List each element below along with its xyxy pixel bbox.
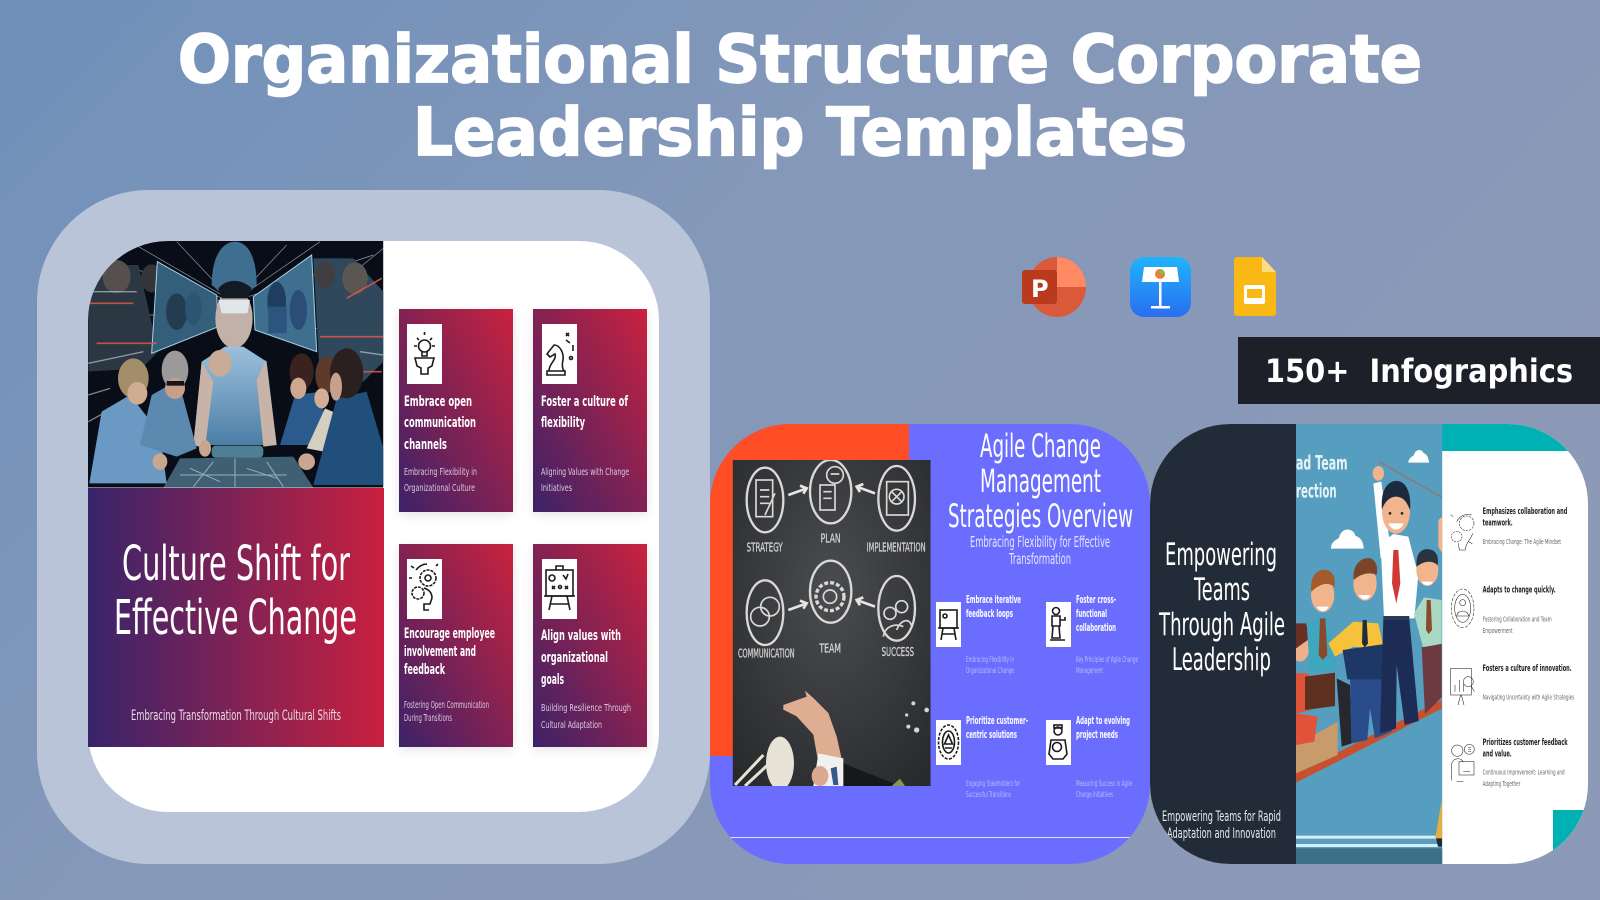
panel: agile leadership slide: [1150, 424, 1588, 864]
illustration: team climbing with leader: ad Team: [1296, 451, 1348, 474]
item: evolving project needs: [1046, 715, 1132, 799]
icon: google slides: [1234, 257, 1276, 316]
heading: empowering teams: Adaptation and Innovation: [1167, 826, 1276, 842]
heading: empowering teams: Teams: [1193, 572, 1250, 608]
heading: agile change management: [948, 427, 1133, 568]
card: culture of flexibility: Foster a culture of: [541, 394, 629, 410]
item: cross-functional collaboration: Foster cross-: [1076, 594, 1116, 606]
photo: chalkboard diagram: SUCCESS: [882, 644, 914, 659]
photo: leadership team at holographic table: [87, 240, 383, 488]
item: evolving project needs: Change Initiatives: [1076, 790, 1113, 799]
item: adapts to change: Empowerment: [1483, 627, 1513, 635]
icon: strategy board: [542, 559, 577, 619]
title block: culture shift: Effective Change: [114, 590, 357, 646]
icon: powerpoint: P: [1031, 275, 1049, 303]
card: employee involvement: involvement and: [404, 644, 476, 660]
item: iterative feedback: Organizational Change: [966, 666, 1014, 675]
item: customer feedback: [1452, 738, 1568, 788]
card: culture of flexibility: Aligning Values with Change: [541, 467, 629, 478]
card: open communication: [399, 309, 513, 512]
card: employee involvement: During Transitions: [404, 713, 452, 724]
title block: culture shift: Embracing Transformation Through Cultural Shifts: [131, 708, 341, 724]
icon: bulb with gears: [1451, 514, 1474, 550]
illustration: team climbing with leader: rection: [1296, 479, 1337, 502]
photo: chalkboard diagram: IMPLEMENTATION: [867, 540, 926, 555]
icon: gear with person: [1451, 589, 1474, 628]
title: [178, 21, 1422, 171]
icon: chess knight strategy: [542, 324, 577, 384]
item: customer-centric solutions: Engaging Stakeholders for: [966, 779, 1020, 788]
heading: agile change management: Embracing Flexibility for Effective: [970, 533, 1110, 551]
icon: brain gear bulb: [407, 559, 442, 619]
card: culture of flexibility: Initiatives: [541, 483, 572, 494]
item: customer-centric solutions: Successful Transitions: [966, 790, 1011, 799]
icon: keynote: [1130, 257, 1191, 317]
card: open communication: Embrace open: [404, 394, 472, 410]
card: organizational goals: Cultural Adaptation: [541, 720, 602, 731]
badge: 150+ infographics: [1238, 337, 1600, 404]
badge: 150+ infographics: 150+ Infographics: [1265, 352, 1573, 390]
item: iterative feedback: [936, 594, 1021, 675]
photo: chalkboard diagram: COMMUNICATION: [738, 645, 795, 660]
item: collaboration and teamwork: teamwork.: [1483, 519, 1513, 529]
item: iterative feedback: Embracing Flexibility in: [966, 655, 1014, 664]
item: culture of innovation: [1451, 664, 1575, 705]
card: employee involvement: Encourage employee: [404, 626, 495, 642]
item: collaboration and teamwork: [1451, 507, 1567, 550]
heading: agile change management: Transformation: [1008, 550, 1071, 568]
panel: agile change slide: [710, 424, 1150, 864]
icon: customers with laptop: [1452, 744, 1474, 782]
item: evolving project needs: Measuring Success in Agile: [1076, 779, 1132, 788]
heading: agile change management: Strategies Overview: [948, 497, 1133, 535]
card: employee involvement: Fostering Open Communication: [404, 700, 489, 711]
card: open communication: Organizational Culture: [404, 483, 475, 494]
item: cross-functional collaboration: Management: [1076, 666, 1103, 675]
item: adapts to change: Fostering Collaboration and Team: [1483, 615, 1552, 623]
heading: empowering teams: Empowering: [1165, 537, 1277, 573]
photo: chalkboard diagram: [733, 460, 931, 790]
title: Organizational Structure Corporate: [178, 21, 1422, 98]
item: customer feedback: Adapting Together: [1483, 780, 1520, 788]
photo: chalkboard diagram: STRATEGY: [747, 540, 783, 555]
title: Leadership Templates: [413, 94, 1187, 171]
item: customer-centric solutions: [936, 715, 1028, 799]
card: organizational goals: goals: [541, 672, 564, 688]
item: evolving project needs: Adapt to evolving: [1076, 715, 1130, 727]
item: customer feedback: and value.: [1483, 750, 1512, 760]
item: cross-functional collaboration: [1046, 594, 1138, 675]
item: customer-centric solutions: centric solutions: [966, 729, 1017, 741]
heading: empowering teams: Leadership: [1172, 642, 1271, 678]
heading: empowering teams: Empowering Teams for Rapid: [1162, 809, 1281, 825]
heading: empowering teams: Through Agile: [1158, 607, 1285, 643]
photo: chalkboard diagram: TEAM: [819, 640, 841, 655]
item: iterative feedback: Embrace iterative: [966, 594, 1021, 606]
title block: culture shift: [88, 488, 384, 747]
item: cross-functional collaboration: functional: [1076, 608, 1107, 620]
card: open communication: channels: [404, 437, 447, 453]
photo: chalkboard diagram: PLAN: [821, 531, 841, 546]
card: organizational goals: [533, 544, 647, 747]
card: organizational goals: Building Resilience Through: [541, 703, 631, 714]
item: iterative feedback: feedback loops: [966, 608, 1013, 620]
card: employee involvement: [399, 544, 513, 747]
card: culture of flexibility: flexibility: [541, 415, 585, 431]
item: customer-centric solutions: Prioritize customer-: [966, 715, 1028, 727]
icon: powerpoint: [1022, 257, 1086, 317]
card: open communication: communication: [404, 415, 476, 431]
icon: light bulb with gear: [407, 324, 442, 384]
heading: agile change management: Agile Change: [980, 427, 1101, 465]
icon: chart board with magnifier: [1451, 668, 1474, 705]
heading: agile change management: Management: [980, 462, 1101, 500]
panel: culture shift slide frame: [37, 190, 710, 864]
card: organizational goals: Align values with: [541, 628, 621, 644]
item: evolving project needs: project needs: [1076, 729, 1118, 741]
title block: culture shift: Culture Shift for: [122, 536, 350, 592]
card: organizational goals: organizational: [541, 650, 608, 666]
card: culture of flexibility: [533, 309, 647, 512]
item: cross-functional collaboration: collaboration: [1076, 622, 1116, 634]
card: employee involvement: feedback: [404, 662, 445, 678]
illustration: team climbing with leader: [1290, 424, 1442, 864]
item: adapts to change: [1451, 586, 1556, 635]
item: cross-functional collaboration: Key Principles of Agile Change: [1076, 655, 1138, 664]
heading: empowering teams: [1158, 537, 1285, 842]
card: open communication: Embracing Flexibility in: [404, 467, 477, 478]
